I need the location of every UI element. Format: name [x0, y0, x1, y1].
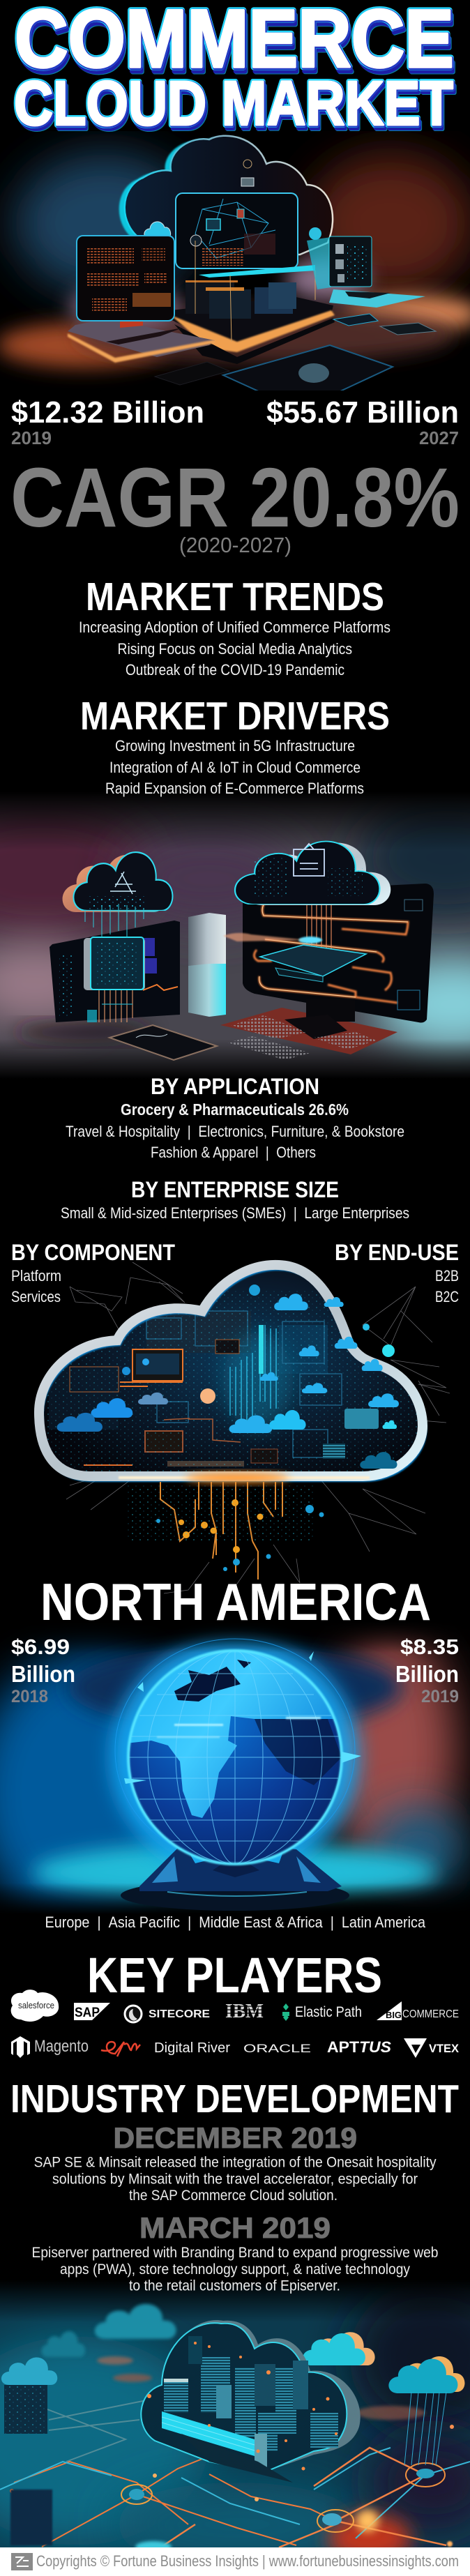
lit land — [126, 1646, 335, 1818]
logo: Oracle: ORACLE — [243, 2042, 311, 2055]
small keyboard — [228, 1036, 310, 1060]
globe scene background — [0, 1621, 470, 1932]
tablet — [221, 344, 395, 391]
logo: Magento — [11, 2036, 89, 2058]
development: December 2019 — [34, 2121, 437, 2204]
section: market drivers: Growing Investment in 5G Infrastructure — [115, 737, 355, 755]
globe base — [121, 1848, 349, 1911]
logo: SAP — [74, 2003, 110, 2020]
logo: VTEX — [404, 2038, 460, 2058]
section: market trends — [79, 575, 391, 679]
heading: by component — [11, 1240, 175, 1305]
circuit scene background — [0, 2280, 470, 2566]
development: December 2019: the SAP Commerce Cloud solution. — [129, 2188, 338, 2204]
inner device — [84, 937, 145, 1022]
orbit flares — [124, 1651, 361, 1784]
logo: salesforce: salesforce — [18, 2000, 54, 2010]
left tablet — [50, 920, 180, 1022]
logo: Magento: Magento — [34, 2037, 89, 2056]
section: by application: Grocery & Pharmaceuticals 26.6% — [121, 1100, 349, 1119]
logo: Apttus: APTTUS — [327, 2038, 391, 2056]
streaks — [157, 1717, 321, 1738]
left monitor — [68, 236, 215, 363]
logo: Elastic Path: Elastic Path — [295, 2004, 362, 2020]
stat: 2027 market size: $55.67 Billion — [266, 395, 459, 430]
icon: Fortune Business Insights logo — [11, 2553, 33, 2570]
circuit traces below cloud — [160, 1482, 282, 1579]
buildings — [164, 2336, 338, 2470]
scene background — [0, 791, 470, 1079]
orbit ring — [115, 1639, 355, 1862]
stat: 2027 market size — [266, 395, 459, 448]
title: Commerce Cloud Market — [14, 0, 456, 143]
section: by enterprise size: Small & Mid-sized Enterprises (SMEs) | Large Enterprises — [61, 1204, 409, 1222]
logo: BigCommerce — [377, 2001, 459, 2020]
logo: IBM: IBM — [225, 2001, 264, 2022]
section: market trends: Increasing Adoption of Unified Commerce Platforms — [79, 619, 391, 636]
heading: by end-use: B2C — [435, 1288, 459, 1305]
dark continents — [174, 1660, 342, 1785]
stat: North America 2018: $6.99 — [11, 1635, 70, 1659]
illustration: globe — [0, 1621, 470, 1932]
stat: 2019 market size — [11, 395, 204, 448]
illustration: circuit cloud — [34, 1259, 450, 1604]
heading: by component: Services — [11, 1288, 61, 1305]
section: by application: Travel & Hospitality | Electronics, Furniture, & Bookstore — [66, 1123, 404, 1140]
right monitor with glowing traces — [223, 884, 434, 1022]
section: by application: BY APPLICATION — [151, 1074, 319, 1099]
development: March 2019: apps (PWA), store technology support, & native technology — [60, 2261, 410, 2278]
heading: by end-use: B2B — [435, 1267, 459, 1285]
orange mini monitor — [120, 1349, 183, 1386]
phone — [109, 1025, 217, 1060]
stat: North America 2018: 2018 — [11, 1687, 48, 1706]
logo: VTEX: VTEX — [429, 2042, 460, 2055]
hero illustration: cloud platform with devices — [0, 136, 470, 410]
section: market drivers: Integration of AI & IoT in Cloud Commerce — [109, 759, 361, 776]
silver tower — [188, 913, 226, 1017]
stat: 2019 market size: 2019 — [11, 427, 52, 448]
stat: North America 2018: Billion — [11, 1661, 75, 1687]
circuit nodes — [126, 1485, 324, 1571]
logo: Elastic Path — [282, 2003, 362, 2021]
section: by enterprise size — [61, 1177, 409, 1222]
logos: key players — [11, 1990, 460, 2058]
logo: BigCommerce: COMMERCE — [402, 2008, 459, 2020]
blurred background clouds — [42, 2304, 425, 2420]
stat: North America 2019 — [395, 1635, 459, 1706]
development: March 2019 — [32, 2211, 438, 2294]
globe sphere — [126, 1646, 344, 1865]
small blue clouds — [57, 1285, 399, 1469]
logo: Sitecore: SITECORE — [149, 2008, 210, 2020]
section: market trends: MARKET TRENDS — [86, 575, 384, 619]
section: market trends: Outbreak of the COVID-19 Pandemic — [126, 661, 344, 679]
logo: salesforce — [11, 1990, 59, 2022]
server racks and platform — [171, 241, 335, 364]
stat: 2027 market size: 2027 — [419, 427, 459, 448]
section: market drivers: MARKET DRIVERS — [80, 694, 390, 738]
logo: Episerver — [101, 2042, 140, 2056]
heading: by component: BY COMPONENT — [11, 1240, 175, 1265]
development: March 2019: to the retail customers of Episerver. — [129, 2278, 340, 2294]
central glass panel — [176, 193, 315, 278]
heading: North America: NORTH AMERICA — [40, 1573, 431, 1631]
section: market drivers: Rapid Expansion of E-Commerce Platforms — [105, 780, 364, 797]
left cloud and block — [1, 2358, 57, 2434]
glowing base line — [119, 1473, 370, 1483]
network lines — [66, 1262, 450, 1604]
stat: North America 2018 — [11, 1635, 75, 1706]
logo: SAP: SAP — [75, 2006, 100, 2020]
heading: by end-use: BY END-USE — [335, 1240, 459, 1265]
right cloud with rain lines — [388, 2356, 464, 2465]
central cloud city — [141, 2320, 361, 2483]
stat: North America 2019: Billion — [395, 1661, 459, 1687]
circuit nodes — [10, 2425, 454, 2552]
stat: North America 2019: $8.35 — [400, 1635, 459, 1659]
right cloud — [235, 842, 391, 905]
right monitor — [307, 236, 425, 308]
grid — [126, 1651, 344, 1864]
development: March 2019: Episerver partnered with Branding Brand to expand progressive web — [32, 2245, 438, 2261]
illustration: cloud city on circuit board — [0, 2280, 470, 2566]
section: by application — [66, 1074, 404, 1161]
logo: Sitecore — [125, 2006, 210, 2022]
circuit traces — [0, 2399, 470, 2547]
development: December 2019: SAP SE & Minsait released the integration of the Onesait hospitality — [34, 2155, 437, 2170]
globe rim glow — [128, 1651, 342, 1864]
cloud outline — [39, 1265, 425, 1480]
hero background glows — [0, 153, 470, 368]
stat: North America 2019: 2019 — [421, 1687, 459, 1706]
heading: by end-use — [335, 1240, 459, 1305]
monitor stand and keyboard base — [220, 999, 397, 1054]
heading: by component: Platform — [11, 1267, 61, 1285]
logo: BigCommerce: BIG — [386, 2010, 402, 2020]
stat: CAGR: (2020-2027) — [179, 533, 291, 557]
stat: 2019 market size: $12.32 Billion — [11, 395, 204, 430]
heading: key players: KEY PLAYERS — [87, 1948, 382, 2003]
development: March 2019: MARCH 2019 — [139, 2211, 331, 2244]
section: market drivers — [80, 694, 390, 797]
right top cloud — [303, 2332, 375, 2365]
cloud interior — [44, 1270, 418, 1471]
development: December 2019: DECEMBER 2019 — [113, 2121, 357, 2154]
regions list: Europe | Asia Pacific | Middle East & Africa | Latin America — [45, 1914, 426, 1931]
logo: Digital River: Digital River — [154, 2040, 230, 2056]
section: by application: Fashion & Apparel | Others — [151, 1144, 316, 1161]
footer — [0, 2547, 470, 2576]
small phones — [155, 314, 436, 385]
cloud — [119, 136, 333, 256]
section: by enterprise size: BY ENTERPRISE SIZE — [131, 1177, 339, 1202]
left cloud — [63, 852, 172, 938]
development: December 2019: solutions by Minsait with the travel accelerator, especially for — [52, 2172, 418, 2187]
section: market trends: Rising Focus on Social Media Analytics — [117, 640, 352, 658]
illustration: devices and clouds — [0, 791, 470, 1079]
